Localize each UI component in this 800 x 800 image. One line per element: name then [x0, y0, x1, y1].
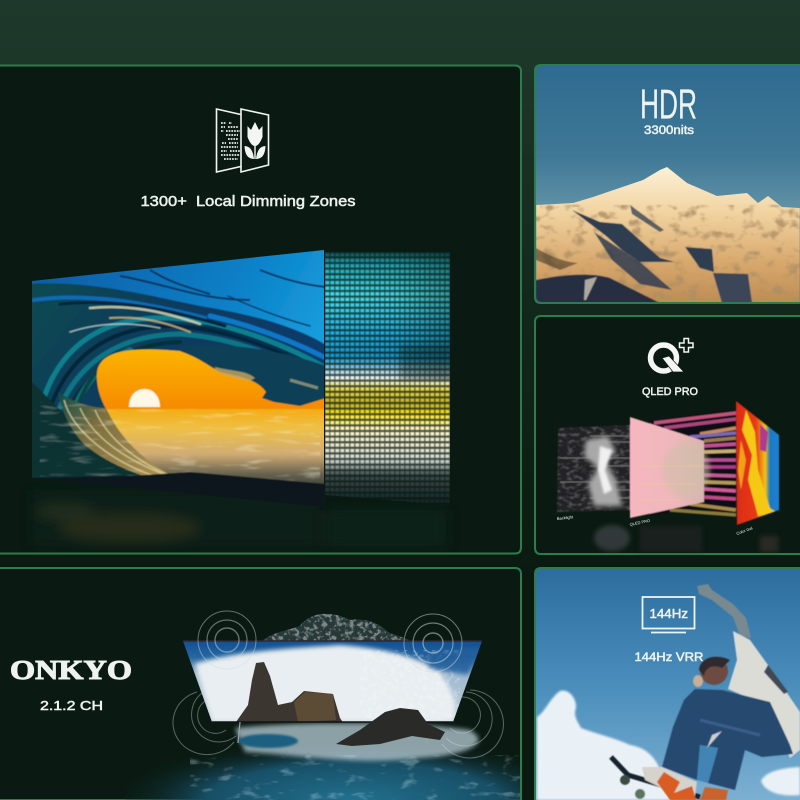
sea spray above the tv	[263, 614, 410, 640]
icon: 144hz monitor	[642, 597, 694, 632]
image: led backlight dot grid	[325, 250, 451, 506]
layer: colorful panel	[735, 400, 781, 528]
jeans	[662, 689, 793, 790]
skateboard	[611, 757, 700, 797]
image: snow mountain at sunrise	[536, 66, 800, 303]
layer: pink quantum dot film	[630, 417, 710, 518]
sound rings	[173, 611, 503, 758]
icon: 144hz monitor: 144Hz	[650, 607, 688, 621]
head	[700, 657, 728, 685]
sun	[129, 389, 160, 407]
shirt	[728, 631, 800, 758]
reflection under the television	[34, 490, 446, 546]
text: 144hz vrr: 144Hz VRR	[634, 650, 704, 664]
panel: hdr 3300 nits	[535, 65, 800, 303]
layer: grayscale backlight	[556, 425, 632, 515]
mountain shadows	[536, 205, 752, 303]
image: wave at sunset on tv screen	[30, 248, 326, 510]
logo: hdr: HDR	[640, 80, 697, 128]
panel: onkyo 2.1.2 channel sound	[0, 568, 521, 800]
clouds	[537, 690, 800, 800]
tube streaks	[32, 294, 324, 410]
icon: dimming zones panels with tulip	[216, 109, 268, 172]
icon: q plus	[650, 338, 693, 372]
tiny layer captions	[557, 514, 753, 536]
tv on stand legs	[183, 641, 482, 743]
ocean	[125, 722, 520, 800]
text: 2.1.2 ch: 2.1.2 CH	[40, 699, 103, 713]
reflection under qled layers	[594, 525, 778, 552]
image: skateboarder in the sky	[536, 569, 800, 800]
skater	[611, 584, 800, 800]
image: quantum dot layers	[556, 400, 781, 528]
image: ocean and tv with sound waves	[125, 608, 520, 800]
heading: qled pro: QLED PRO	[642, 386, 698, 398]
rocks in the foreground	[336, 708, 445, 746]
golden sea reflection	[106, 408, 324, 484]
panel: 144hz vrr	[535, 568, 800, 800]
heading: local dimming zones: 1300+ Local Dimming Zones	[140, 194, 356, 210]
panel: local dimming zones	[0, 66, 521, 554]
panel: qled pro	[535, 316, 800, 554]
raised arm	[697, 584, 751, 638]
text: 3300nits: 3300nits	[644, 125, 694, 137]
shoes	[642, 767, 697, 796]
sunset hollow of wave	[97, 349, 326, 409]
layer: color stripes between pink and color panels	[650, 410, 736, 517]
tiny layer captions: Color Gel	[736, 525, 753, 536]
tiny layer captions: QLED PRO	[629, 518, 650, 527]
logo: onkyo: ONKYO	[10, 655, 132, 685]
lower curl of wave	[32, 382, 141, 478]
tiny layer captions: Backlight	[557, 514, 574, 521]
